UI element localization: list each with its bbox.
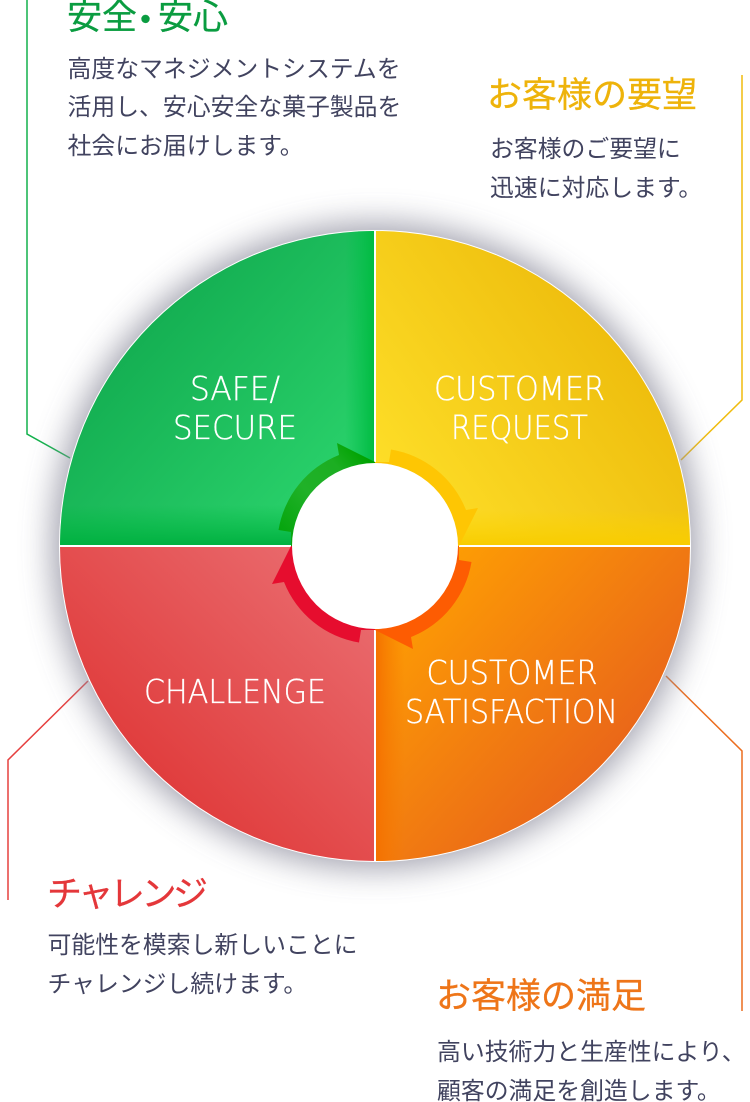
quadrant: customer satisfaction bbox=[376, 547, 690, 861]
text: safe/secure: 社会にお届けします。 bbox=[68, 132, 304, 160]
text: safe/secure: 活用し、安心安全な菓子製品を bbox=[68, 94, 401, 121]
wheel shadow bbox=[52, 223, 698, 869]
heading: customer request: お客様の要望 bbox=[487, 76, 697, 115]
text: safe/secure: 高度なマネジメントシステムを bbox=[68, 56, 401, 82]
arrow: yellow bbox=[375, 450, 478, 546]
arrow: green bbox=[278, 443, 375, 546]
text: customer request: お客様のご要望に bbox=[490, 136, 681, 163]
text: customer request bbox=[490, 136, 702, 202]
connector line: customer satisfaction bbox=[666, 676, 742, 1011]
text: challenge bbox=[48, 932, 357, 998]
connector line: challenge bbox=[8, 681, 88, 900]
quadrant: customer request bbox=[376, 231, 690, 545]
center hole bbox=[292, 463, 458, 629]
connector line: customer request bbox=[681, 75, 742, 460]
arrow: red bbox=[272, 546, 375, 642]
text: customer satisfaction bbox=[437, 1039, 746, 1102]
text: challenge: チャレンジし続けます。 bbox=[48, 970, 307, 998]
wheel rim bbox=[59, 230, 691, 862]
arrow: orange bbox=[375, 546, 472, 649]
text: customer request: 迅速に対応します。 bbox=[490, 174, 702, 202]
quadrant: safe/secure: SAFE/ bbox=[190, 369, 280, 408]
text: customer satisfaction: 高い技術力と生産性により、 bbox=[437, 1039, 746, 1066]
quadrant: customer request: CUSTOMER bbox=[434, 369, 605, 408]
heading: challenge: チャレンジ bbox=[47, 875, 205, 914]
quadrant: customer satisfaction: CUSTOMER bbox=[426, 653, 598, 692]
text: challenge: 可能性を模索し新しいことに bbox=[48, 932, 357, 959]
quadrant: challenge bbox=[60, 547, 374, 861]
quadrant: safe/secure: SECURE bbox=[173, 408, 297, 447]
heading: safe/secure: • bbox=[140, 3, 151, 36]
quadrant: customer satisfaction: SATISFACTION bbox=[405, 692, 618, 731]
quadrant: customer request: REQUEST bbox=[451, 408, 588, 447]
cycle arrows bbox=[272, 443, 478, 649]
connector line: safe/secure bbox=[27, 0, 70, 458]
text: safe/secure bbox=[68, 56, 401, 160]
quadrant: safe/secure bbox=[60, 231, 374, 545]
quadrant: challenge: CHALLENGE bbox=[144, 672, 326, 711]
heading: customer satisfaction: お客様の満足 bbox=[436, 977, 646, 1016]
